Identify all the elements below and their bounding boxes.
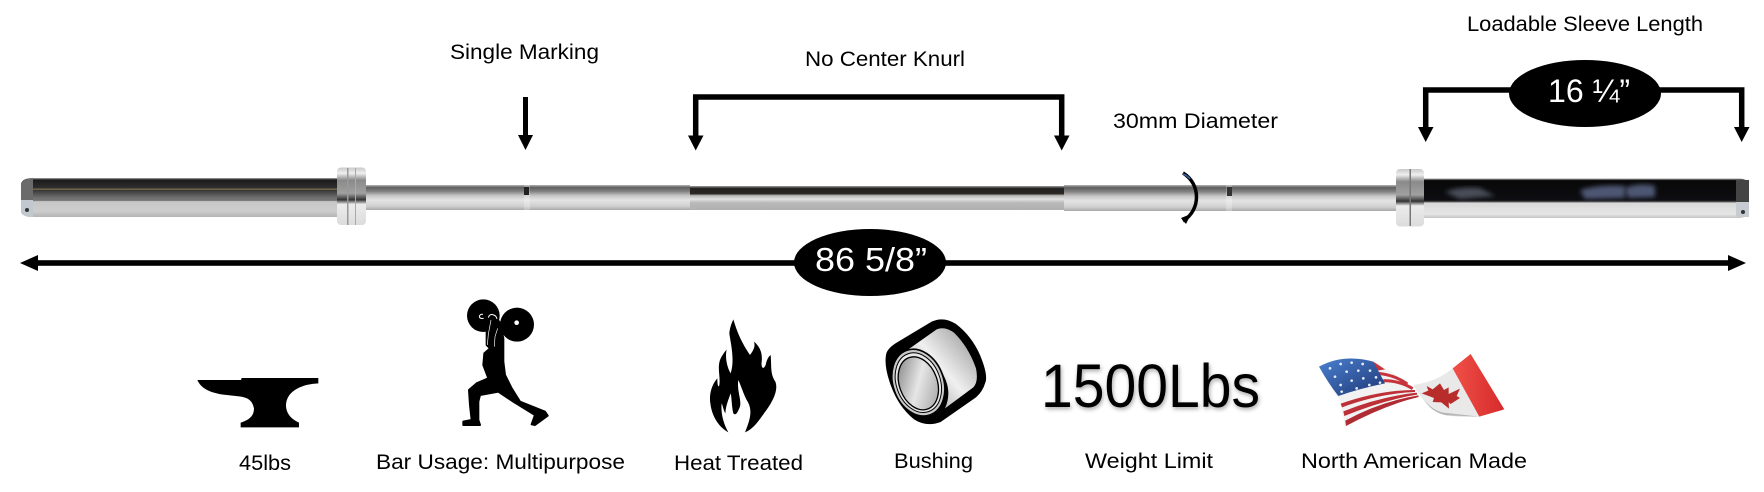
left marking — [524, 185, 530, 210]
icon: weightlifter — [463, 299, 548, 425]
Canadian flag — [1413, 354, 1504, 417]
badge: 16 1/4 inches — [1509, 60, 1661, 127]
label: North American Made: North American Made — [1301, 450, 1527, 473]
icon: bushing — [883, 319, 986, 424]
label: Bushing: Bushing — [894, 450, 973, 473]
label: Heat Treated: Heat Treated — [674, 452, 803, 475]
US flag — [1319, 358, 1419, 426]
label: No Center Knurl: No Center Knurl — [805, 48, 965, 71]
badge: 86 5/8 inches: 86 5/8” — [815, 241, 927, 278]
label: Loadable Sleeve Length: Loadable Sleeve Length — [1467, 13, 1703, 36]
icon: US and Canada flags — [1319, 354, 1504, 426]
right collar — [1396, 169, 1424, 226]
right sleeve — [1424, 178, 1749, 218]
bracket: no center knurl — [688, 97, 1070, 150]
center smooth section — [690, 186, 1064, 210]
dimension arrow: overall length — [20, 229, 1746, 296]
left sleeve — [21, 178, 337, 217]
icon: anvil — [197, 378, 318, 427]
left knurled shaft — [366, 185, 690, 210]
arrow: single marking — [518, 97, 533, 150]
label: 45lbs: 45lbs — [239, 452, 291, 475]
badge: 86 5/8 inches — [794, 229, 946, 296]
label: Single Marking: Single Marking — [450, 41, 599, 64]
label: 30mm Diameter: 30mm Diameter — [1113, 110, 1278, 133]
label: Weight Limit: Weight Limit — [1085, 450, 1213, 473]
left collar — [337, 168, 366, 225]
bracket: loadable sleeve length — [1418, 60, 1750, 142]
badge: 16 1/4 inches: 16 ¼” — [1548, 73, 1630, 109]
icon: flame — [710, 319, 776, 432]
icon: 30mm rotation arrow — [1181, 173, 1196, 224]
right knurled shaft — [1064, 185, 1396, 211]
weight limit figure: 1500Lbs — [1041, 352, 1260, 420]
right marking — [1226, 185, 1232, 211]
label: Bar Usage: Multipurpose: Bar Usage: Multipurpose — [376, 451, 625, 474]
barbell — [21, 168, 1749, 226]
